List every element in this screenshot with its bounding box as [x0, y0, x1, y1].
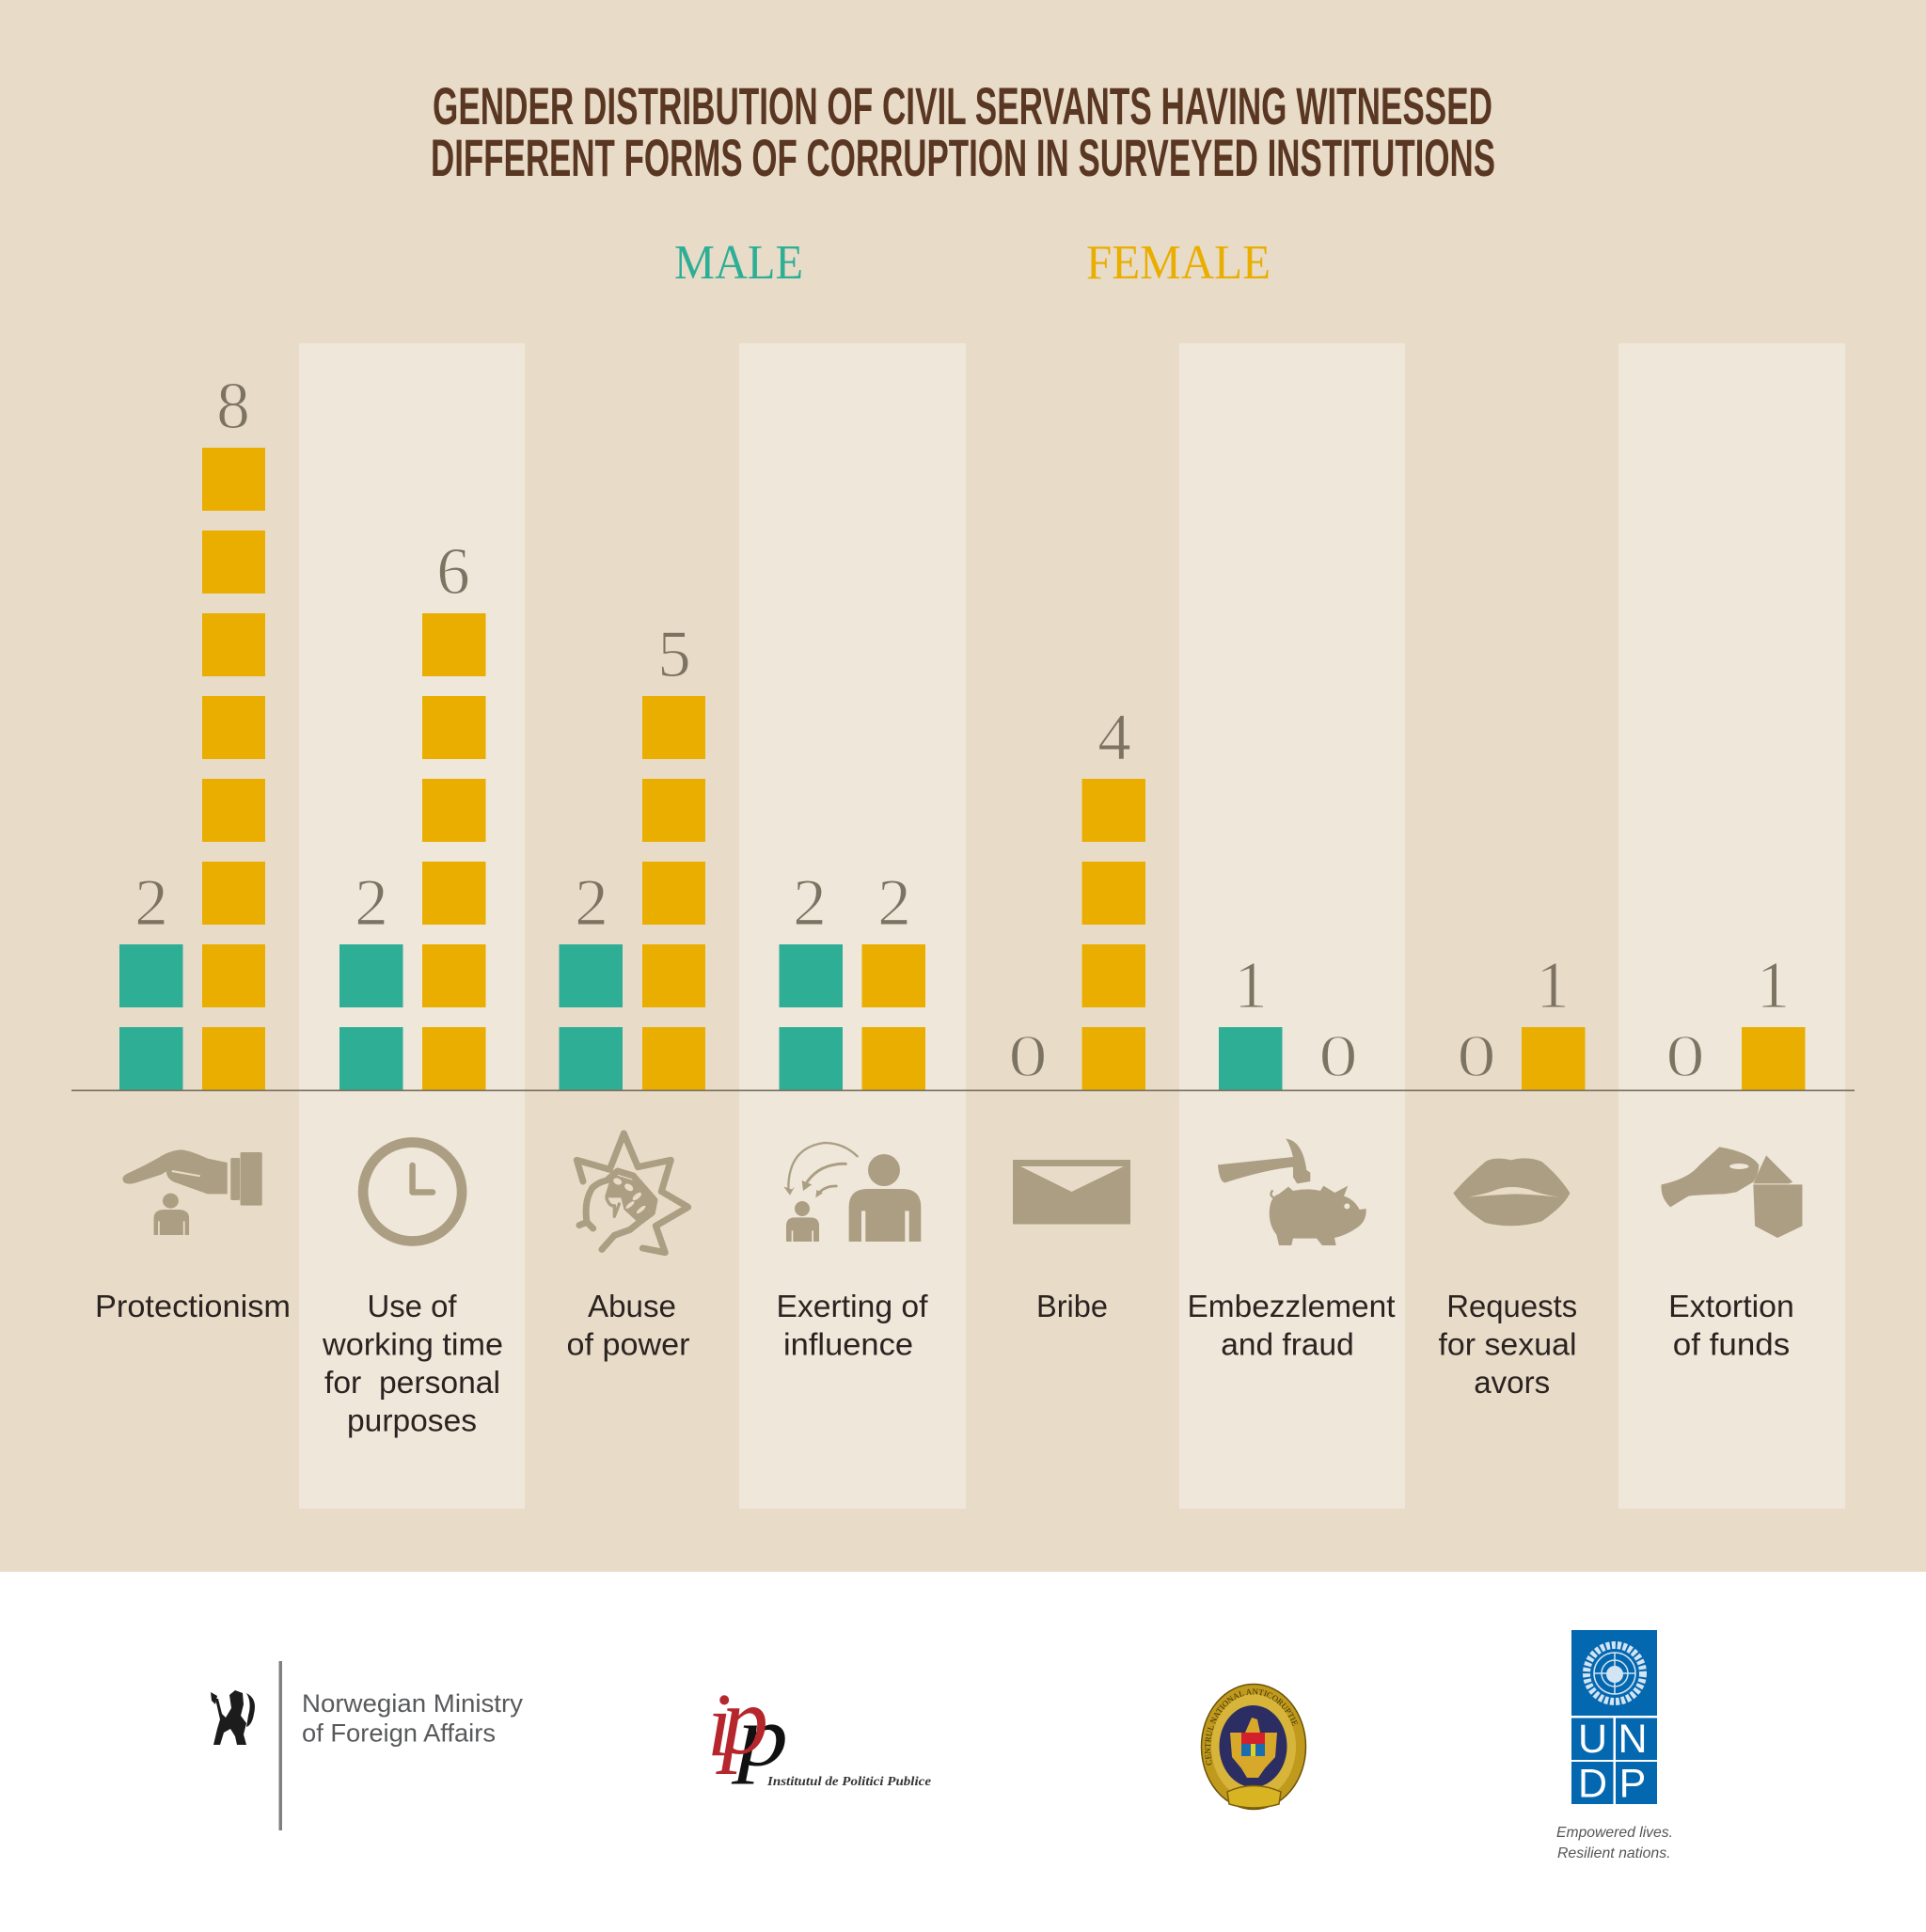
icon: hand and pouch — [1661, 1147, 1802, 1238]
label: Protectionism — [95, 1290, 291, 1324]
icon: people and arrows — [783, 1143, 921, 1242]
label — [1187, 1290, 1396, 1362]
label: Bribe — [1036, 1290, 1108, 1324]
bars: male 1 — [1219, 1027, 1283, 1090]
legend: MALE — [674, 236, 803, 290]
label: Embezzlement — [1187, 1290, 1396, 1324]
tagline — [1556, 1825, 1673, 1861]
value female: 5 — [657, 618, 691, 691]
bars: female 8 — [202, 448, 265, 1090]
label: for sexual — [1439, 1328, 1576, 1362]
label — [322, 1290, 503, 1439]
chart axis — [71, 1089, 1855, 1091]
value male: 2 — [575, 866, 608, 940]
legend — [674, 236, 1271, 290]
logo: UNDP — [1556, 1630, 1673, 1861]
label — [777, 1290, 928, 1362]
panel: protectionism — [95, 370, 291, 1324]
organisation name: Norwegian Ministry — [302, 1689, 523, 1718]
logo: Institutul de Politici Publice: p — [731, 1688, 788, 1784]
value female: 4 — [1097, 701, 1131, 774]
bars: male 2 — [339, 944, 403, 1090]
tagline: Empowered lives. — [1556, 1825, 1673, 1841]
letters: D — [1578, 1761, 1607, 1806]
value male: 0 — [1008, 1022, 1048, 1089]
title — [431, 76, 1495, 187]
panel: abuse of power — [559, 618, 705, 1362]
panel: extortion of funds — [1661, 949, 1806, 1362]
label: Extortion — [1668, 1290, 1794, 1324]
organisation name: of Foreign Affairs — [302, 1719, 496, 1748]
icon: clock — [363, 1142, 462, 1242]
panel: exerting of influence — [777, 866, 928, 1362]
panel: requests for sexual favors — [1439, 949, 1586, 1401]
value male: 2 — [355, 866, 388, 940]
letters — [1578, 1717, 1648, 1806]
icon: UN emblem — [1587, 1645, 1643, 1702]
label — [1668, 1290, 1794, 1362]
label — [566, 1290, 690, 1362]
label: of funds — [1673, 1328, 1790, 1362]
letters: N — [1618, 1717, 1648, 1762]
panel: column backgrounds — [299, 343, 1845, 1509]
icon: hammer and piggy bank — [1218, 1139, 1366, 1245]
panel: embezzlement and fraud — [1187, 949, 1396, 1362]
organisation name — [302, 1689, 523, 1748]
label: purposes — [347, 1403, 477, 1439]
logo: Institutul de Politici Publice: Institutul de Politici Publice — [766, 1775, 931, 1789]
bars: female 4 — [1081, 779, 1145, 1090]
logo: Institutul de Politici Publice: i — [707, 1674, 732, 1775]
bars: male 2 — [119, 944, 182, 1090]
value male: 0 — [1457, 1022, 1496, 1089]
label: working time — [322, 1328, 503, 1362]
logo: Norwegian Ministry of Foreign Affairs — [211, 1661, 523, 1830]
bars: male 2 — [559, 944, 623, 1090]
tagline: Resilient nations. — [1557, 1845, 1670, 1861]
logo: national anticorruption centre badge: CENTRUL NATIONAL ANTICORUPTIE — [1205, 1688, 1298, 1765]
label: Abuse — [588, 1290, 676, 1324]
value male: 0 — [1666, 1022, 1705, 1089]
bars: female 2 — [861, 944, 925, 1090]
value female: 1 — [1536, 949, 1570, 1022]
label — [1439, 1290, 1577, 1401]
label: Exerting of — [777, 1290, 928, 1324]
icon: lion crest — [211, 1690, 255, 1745]
bars: female 1 — [1742, 1027, 1806, 1090]
icon: hand over person — [122, 1149, 262, 1235]
icon: envelope — [1013, 1160, 1130, 1225]
panel: use of working time — [322, 535, 503, 1439]
legend: FEMALE — [1086, 236, 1271, 290]
panel: bribe — [1008, 701, 1145, 1324]
value male: 2 — [134, 866, 168, 940]
logo: Institutul de Politici Publice — [707, 1667, 931, 1789]
label: and fraud — [1221, 1328, 1354, 1362]
label: influence — [783, 1328, 913, 1362]
bars: male 2 — [779, 944, 843, 1090]
label: for personal — [324, 1366, 500, 1401]
logo: national anticorruption centre badge — [1200, 1684, 1307, 1810]
letters: P — [1619, 1761, 1646, 1806]
label: of power — [566, 1328, 690, 1362]
value female: 1 — [1757, 949, 1790, 1022]
logo: Institutul de Politici Publice: p — [715, 1667, 768, 1775]
bars: female 5 — [642, 696, 705, 1090]
label: avors — [1474, 1366, 1550, 1401]
icon: fist — [576, 1133, 688, 1253]
label: Use of — [367, 1290, 457, 1324]
value female: 8 — [216, 370, 250, 443]
label: Requests — [1446, 1290, 1577, 1324]
value female: 0 — [1318, 1022, 1358, 1089]
bars: female 6 — [422, 613, 485, 1090]
value male: 1 — [1234, 949, 1268, 1022]
icon: lips — [1453, 1158, 1570, 1226]
bars: female 1 — [1522, 1027, 1586, 1090]
value female: 2 — [877, 866, 911, 940]
letters: U — [1578, 1717, 1607, 1762]
value male: 2 — [793, 866, 827, 940]
value female: 6 — [436, 535, 470, 609]
